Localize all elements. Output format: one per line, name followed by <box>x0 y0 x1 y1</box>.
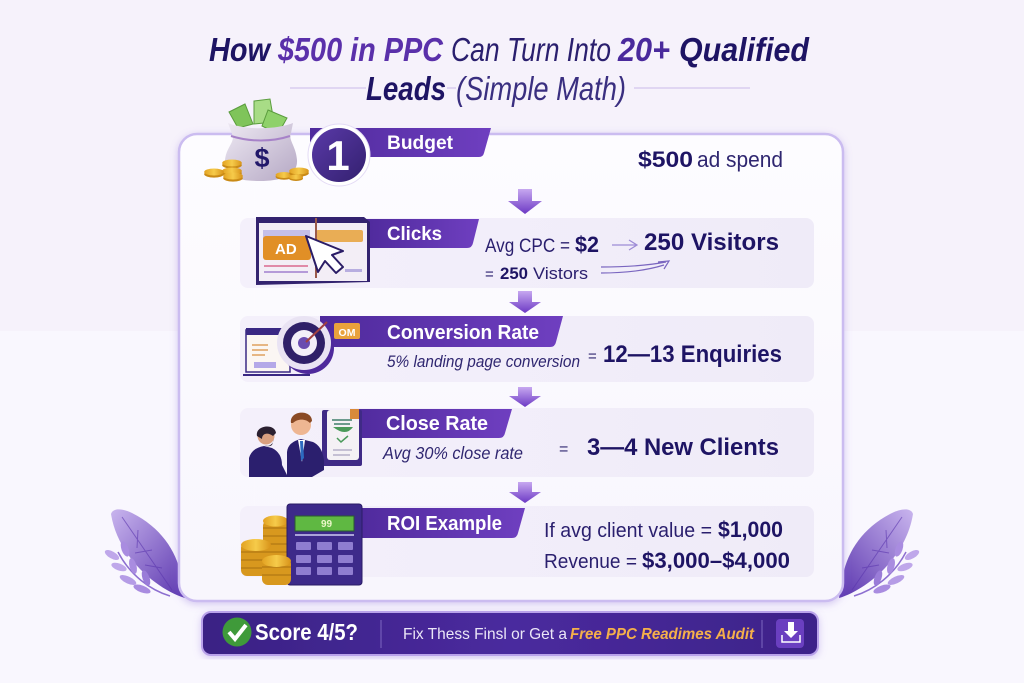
number badge <box>308 124 370 186</box>
arrow <box>509 291 541 313</box>
roi text: Revenue = <box>544 551 637 573</box>
row: conversion <box>240 316 814 382</box>
panel: steps card <box>179 99 843 601</box>
title: Leads <box>366 70 446 107</box>
row: clicks <box>240 217 814 288</box>
title: 20+ <box>617 31 670 68</box>
conversion tag <box>320 316 563 347</box>
clicks tag: Clicks <box>387 223 442 245</box>
conversion text: = <box>588 348 597 365</box>
icon: coins <box>241 516 288 576</box>
arrow: thin <box>612 240 637 250</box>
close rate text <box>382 434 779 463</box>
icon: right leaves <box>839 509 921 598</box>
clicks text: $2 <box>575 232 599 257</box>
title: Can Turn Into <box>451 31 611 68</box>
row: roi <box>240 504 814 585</box>
icon: two people <box>249 413 324 477</box>
score text: Score 4/5? <box>255 619 358 645</box>
row: close rate <box>240 408 814 477</box>
title: How <box>209 31 272 68</box>
budget value <box>638 147 783 172</box>
cta text <box>403 626 755 643</box>
cta text: Fix Thess Finsl or Get a <box>403 626 567 643</box>
clicks text: 250 Visitors <box>644 229 779 256</box>
close rate tag <box>350 409 512 438</box>
icon: calculator: 99 <box>321 519 333 530</box>
arrow <box>508 189 542 214</box>
roi text: $3,000–$4,000 <box>642 548 790 573</box>
title: $500 in PPC <box>277 31 444 68</box>
icon: clipboard <box>322 409 362 466</box>
roi text: $1,000 <box>718 517 783 542</box>
row: budget <box>308 124 783 186</box>
arrow <box>509 387 541 407</box>
budget tag <box>310 128 491 157</box>
icon: ad window: AD <box>275 241 297 258</box>
icon: calculator <box>287 504 362 585</box>
number badge: 1 <box>326 132 350 179</box>
close rate text: Avg 30% close rate <box>382 443 523 463</box>
call to action bar <box>202 612 818 655</box>
title <box>209 31 810 107</box>
conversion text <box>387 341 782 371</box>
roi text: If avg client value = <box>544 520 712 542</box>
icon: target <box>277 316 334 374</box>
budget value: $500 <box>638 147 693 172</box>
conversion text: 5% landing page conversion <box>387 352 580 371</box>
title: (Simple Math) <box>456 70 626 107</box>
icon: money bag <box>204 99 309 182</box>
cta text: Free PPC Readimes Audit <box>570 626 755 643</box>
roi text <box>544 517 790 573</box>
close rate text: 3—4 New Clients <box>587 434 779 461</box>
icon: green check <box>222 618 252 646</box>
close rate tag: Close Rate <box>386 413 488 435</box>
clicks text <box>485 229 779 283</box>
icon: landing page <box>243 328 310 375</box>
budget value: ad spend <box>697 147 783 172</box>
badge: OM: OM <box>339 327 356 339</box>
clicks text: = <box>485 266 494 283</box>
clicks text: Vistors <box>533 264 588 283</box>
close rate text: = <box>559 441 568 458</box>
title: Qualified <box>679 31 810 68</box>
roi tag <box>355 508 525 538</box>
conversion tag: Conversion Rate <box>387 322 539 344</box>
budget tag: Budget <box>387 132 453 154</box>
clicks tag <box>365 219 479 248</box>
clicks text: Avg CPC = <box>485 236 570 257</box>
icon: left leaves <box>103 509 185 598</box>
roi tag: ROI Example <box>387 513 502 535</box>
clicks text: 250 <box>500 264 528 283</box>
icon: money bag: $ <box>254 143 270 173</box>
badge: OM <box>334 323 360 339</box>
icon: ad window <box>256 217 370 285</box>
icon: front coins <box>262 555 291 585</box>
arrow <box>509 482 541 503</box>
icon: download <box>776 619 804 648</box>
conversion text: 12—13 Enquiries <box>603 341 782 368</box>
arrow: double swoosh <box>601 261 669 273</box>
